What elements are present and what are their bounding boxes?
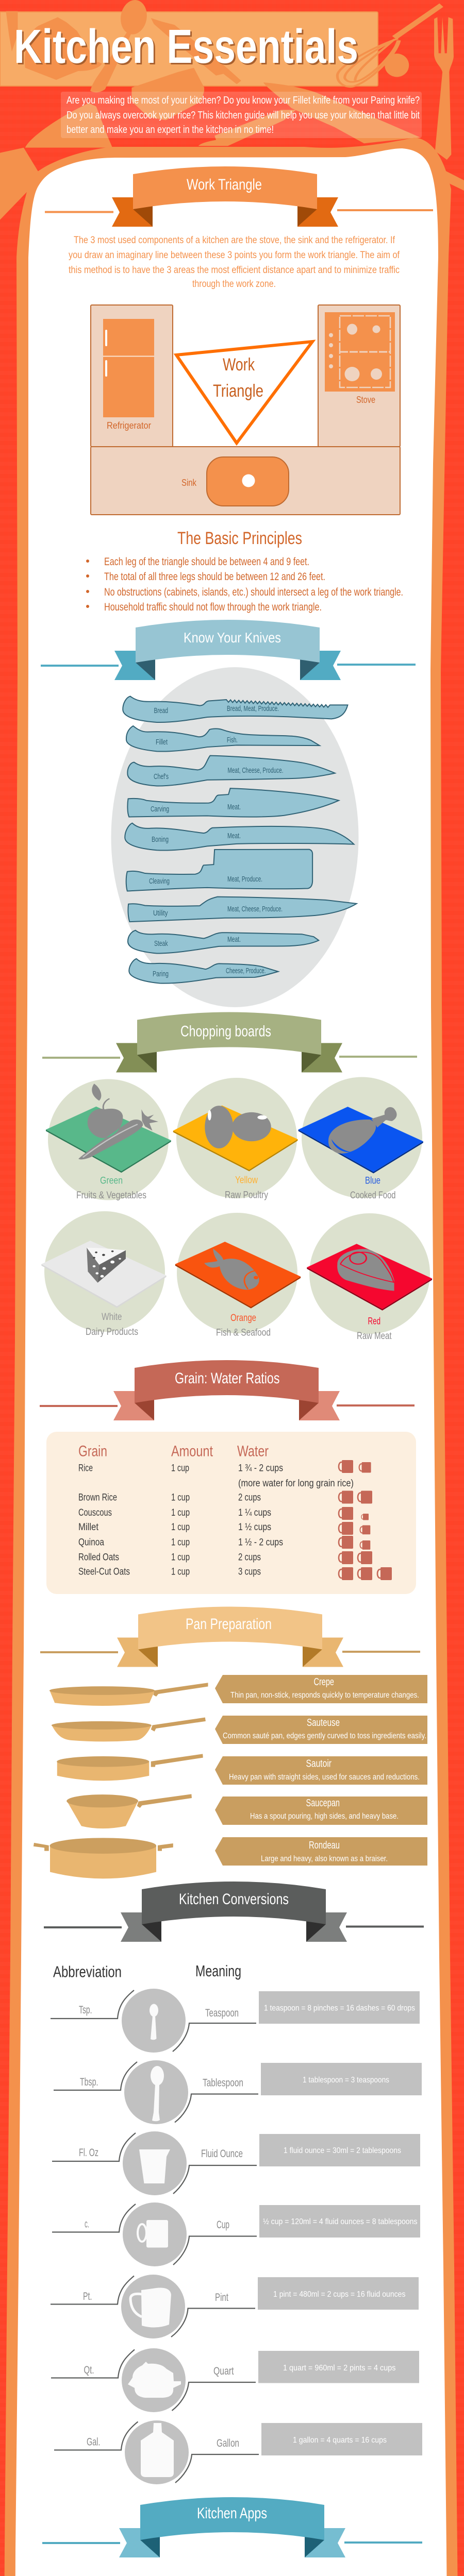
tag: sauteuse: Common sauté pan, edges gently curved to toss ingredients easily. [223, 1732, 426, 1740]
banner: Pan Preparation [40, 1606, 420, 1667]
basic principles: Each leg of the triangle should be between 4 and 9 feet. [104, 556, 309, 568]
conversion: tablespoon: 1 tablespoon = 3 teaspoons [303, 2076, 389, 2084]
pan: sautoir [57, 1754, 203, 1781]
basic principles: The Basic Principles [177, 529, 302, 548]
conversion: teaspoon: Teaspoon [205, 2007, 239, 2019]
conversion column headings [53, 1962, 241, 1980]
tag: sauteuse: Sauteuse [307, 1717, 340, 1728]
banner: Know Your Knives: Know Your Knives [184, 630, 281, 646]
knife labels: Chef's [154, 772, 169, 781]
tag: crepe: Crepe [313, 1676, 334, 1688]
chopping boards and food icons [41, 1083, 432, 1311]
knife labels: Paring [153, 970, 169, 978]
chopping board labels: White [102, 1312, 122, 1323]
knife illustrations [123, 696, 357, 984]
knife labels: Meat. [227, 935, 241, 944]
knife labels: Utility [153, 909, 168, 918]
table rows: 1 ½ - 2 cups [238, 1537, 283, 1548]
intro text panel: better and make you an expert in the kitchen in no time! [67, 124, 274, 135]
banner: Kitchen Apps [42, 2497, 422, 2557]
knife labels: Boning [152, 835, 169, 844]
table rows: Rolled Oats [78, 1552, 119, 1563]
knife labels: Fish. [227, 736, 238, 744]
conversion: pint: Pt. [83, 2291, 92, 2302]
table rows: Brown Rice [78, 1492, 117, 1503]
conversion: cup: ½ cup = 120ml = 4 fluid ounces = 8 tablespoons [263, 2217, 418, 2226]
tag: rondeau: Rondeau [309, 1840, 340, 1851]
conversion: quart: 1 quart = 960ml = 2 pints = 4 cups [283, 2364, 396, 2372]
knife labels: Cleaving [149, 877, 170, 886]
table rows: 1 cup [171, 1566, 190, 1578]
chopping board labels: Dairy Products [86, 1327, 138, 1337]
chopping board labels: Red [368, 1316, 380, 1327]
sink panel [91, 447, 400, 515]
work triangle description: The 3 most used components of a kitchen are the stove, the sink and the refrigerator. If [74, 235, 395, 246]
conversion: quart [51, 2348, 419, 2412]
conversion: pint: Pint [215, 2292, 228, 2303]
tag: crepe: Thin pan, non-stick, responds quickly to temperature changes. [230, 1691, 419, 1700]
conversion column headings: Abbreviation [53, 1963, 122, 1980]
conversion: fluid ounce: 1 fluid ounce = 30ml = 2 tablespoons [284, 2146, 401, 2155]
conversion: quart: Qt. [84, 2364, 94, 2376]
work triangle description: this method is to have the 3 areas the most efficient distance apart and to minimize traffic [69, 265, 400, 276]
board: green [46, 1083, 171, 1173]
table rows: (more water for long grain rice) [238, 1478, 354, 1489]
banner: Grain: Water Ratios: Grain: Water Ratios [175, 1370, 279, 1387]
tag: saucepan [215, 1797, 427, 1825]
chopping board labels: Raw Poultry [225, 1190, 268, 1200]
banner: Kitchen Apps: Kitchen Apps [197, 2505, 267, 2522]
kitchen utensil silhouettes [0, 0, 464, 220]
table rows: 3 cups [238, 1566, 261, 1578]
pan: saucepan [67, 1794, 192, 1828]
knife labels: Meat. [227, 832, 241, 840]
basic principles: The total of all three legs should be between 12 and 26 feet. [104, 571, 325, 583]
table headers: Amount [171, 1443, 213, 1460]
basic principles [86, 529, 403, 613]
knife labels: Meat, Produce. [227, 875, 262, 884]
conversion: teaspoon [51, 1989, 420, 2053]
board: white [41, 1241, 167, 1308]
table rows: Quinoa [78, 1537, 104, 1548]
table rows: Couscous [78, 1507, 112, 1518]
board: red [307, 1244, 432, 1311]
tag: sautoir [215, 1756, 427, 1785]
knives backdrop [111, 667, 359, 1007]
chopping board labels: Orange [230, 1313, 256, 1324]
pan: rondeau [34, 1838, 173, 1878]
banner: Work Triangle: Work Triangle [187, 176, 262, 193]
conversion: tablespoon [54, 2060, 422, 2124]
conversion: tablespoon: Tbsp. [80, 2076, 98, 2088]
refrigerator panel [91, 305, 173, 447]
chopping board labels: Fruits & Vegetables [76, 1190, 146, 1201]
chopping board labels: Cooked Food [350, 1190, 396, 1201]
table rows: Steel-Cut Oats [78, 1566, 130, 1578]
work triangle: Work [223, 355, 255, 375]
chopping board labels: Raw Meat [357, 1331, 392, 1342]
table headers: Grain [78, 1443, 107, 1460]
banner: Pan Preparation: Pan Preparation [186, 1616, 272, 1633]
chopping board labels: Green [100, 1176, 123, 1186]
chopping board labels: Yellow [235, 1175, 258, 1186]
tag: sautoir: Heavy pan with straight sides, used for sauces and reductions. [229, 1773, 420, 1782]
basic principles: Household traffic should not flow through the work triangle. [104, 601, 322, 613]
pan: crepe [49, 1683, 208, 1706]
chopping board labels: Fish & Seafood [216, 1327, 271, 1338]
title: Kitchen Essentials [15, 21, 360, 75]
sink panel: Sink [181, 478, 197, 488]
conversion: tablespoon: Tablespoon [203, 2077, 243, 2089]
chopping board labels [76, 1175, 396, 1342]
stove panel: Stove [356, 395, 375, 405]
knife labels: Fillet [156, 738, 168, 747]
banner: Know Your Knives [41, 620, 416, 680]
table rows: 1 cup [171, 1522, 190, 1533]
chopping board labels: Blue [365, 1176, 380, 1186]
table rows: 2 cups [238, 1552, 261, 1563]
tag: saucepan: Has a spout pouring, high sides, and heavy base. [250, 1812, 399, 1821]
knife labels: Meat, Cheese, Produce. [227, 905, 283, 913]
conversion: gallon: 1 gallon = 4 quarts = 16 cups [293, 2436, 387, 2445]
conversion: cup: c. [85, 2218, 89, 2230]
table rows: 1 cup [171, 1552, 190, 1563]
knife labels: Meat, Cheese, Produce. [228, 766, 284, 775]
banner: Chopping boards [42, 1012, 417, 1073]
knife labels: Steak [154, 939, 168, 948]
title: Kitchen Essentials [14, 20, 358, 73]
table rows: 1 cup [171, 1507, 190, 1518]
header title panel [0, 12, 378, 86]
cup icons [339, 1460, 392, 1580]
banner: Kitchen Conversions: Kitchen Conversions [179, 1891, 289, 1908]
knife labels: Carving [151, 805, 169, 814]
conversion: fluid ounce: Fluid Ounce [201, 2148, 243, 2160]
work triangle description [69, 235, 400, 290]
knife labels: Bread [154, 706, 168, 715]
conversion: teaspoon: Tsp. [79, 2004, 92, 2016]
table rows [78, 1463, 354, 1578]
conversion column headings: Meaning [195, 1962, 241, 1980]
knife labels: Bread, Meat, Produce. [227, 704, 279, 713]
conversion: pint [51, 2275, 419, 2338]
stove panel [318, 305, 400, 447]
grain ratio table [46, 1432, 416, 1594]
table headers [78, 1443, 269, 1460]
knife labels: Cheese, Produce. [226, 967, 266, 975]
conversion: fluid ounce: Fl. Oz [79, 2147, 98, 2159]
conversion: teaspoon: 1 teaspoon = 8 pinches = 16 dashes = 60 drops [264, 2004, 415, 2012]
table rows: 1 cup [171, 1492, 190, 1503]
conversion: gallon [54, 2420, 422, 2484]
knife labels: Meat. [227, 803, 241, 811]
pan description tags [215, 1675, 427, 1866]
tag: crepe [215, 1675, 427, 1703]
work triangle [176, 342, 312, 443]
chopping board backdrops [44, 1077, 430, 1334]
tag: rondeau: Large and heavy, also known as a braiser. [261, 1855, 388, 1863]
intro text panel [61, 92, 422, 138]
pan illustrations [34, 1683, 208, 1878]
tag: saucepan: Saucepan [306, 1798, 340, 1809]
conversion: gallon: Gallon [217, 2437, 239, 2449]
knife labels [149, 704, 284, 978]
banner: Grain: Water Ratios [40, 1360, 415, 1420]
board: orange [175, 1242, 301, 1308]
table headers: Water [237, 1443, 269, 1460]
table rows: Millet [78, 1522, 99, 1533]
conversion: pint: 1 pint = 480ml = 2 cups = 16 fluid ounces [273, 2290, 405, 2299]
table rows: 2 cups [238, 1492, 261, 1503]
table rows: 1 cup [171, 1463, 189, 1473]
tag: rondeau [215, 1837, 427, 1866]
conversion: cup: Cup [217, 2219, 229, 2231]
banner: Kitchen Conversions [44, 1882, 424, 1942]
table rows: 1 ¾ - 2 cups [238, 1463, 283, 1473]
table rows: 1 ½ cups [238, 1522, 271, 1533]
board: yellow [173, 1106, 297, 1171]
kitchen layout diagram [91, 305, 400, 515]
table rows: Rice [78, 1463, 93, 1473]
banner: Work Triangle [45, 166, 433, 227]
table rows: 1 ¼ cups [238, 1507, 271, 1518]
tag: sauteuse [215, 1716, 427, 1744]
tag: sautoir: Sautoir [306, 1758, 332, 1769]
conversion: quart: Quart [213, 2365, 234, 2377]
work triangle description: you draw an imaginary line between these 3 points you form the work triangle. The aim of [69, 250, 400, 261]
conversion: cup [52, 2202, 420, 2266]
pan: sauteuse [52, 1718, 206, 1741]
board: blue [299, 1107, 423, 1173]
refrigerator panel: Refrigerator [107, 420, 151, 431]
conversion: fluid ounce [52, 2131, 420, 2195]
table rows: 1 cup [171, 1537, 190, 1548]
conversion: gallon: Gal. [87, 2436, 100, 2448]
banner: Chopping boards: Chopping boards [180, 1023, 271, 1040]
work triangle description: through the work zone. [192, 279, 276, 290]
work triangle: Triangle [213, 381, 263, 401]
